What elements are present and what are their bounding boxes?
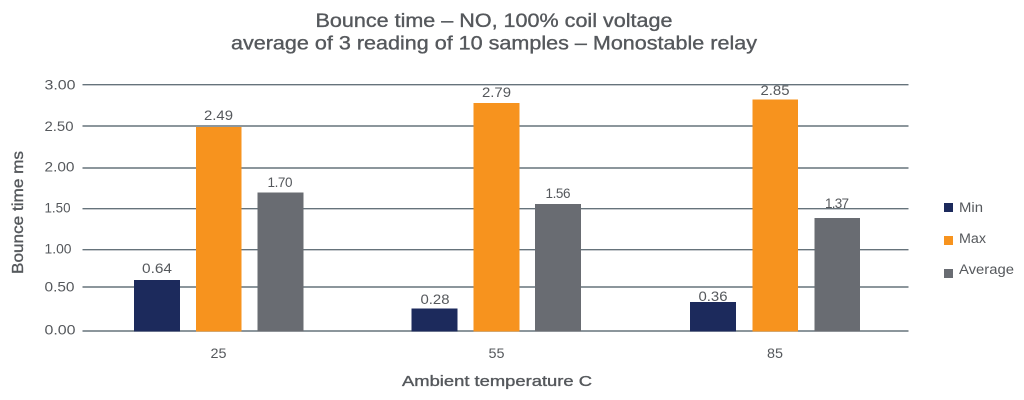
x axis title: Ambient temperature C (402, 374, 592, 390)
value labels (142, 83, 849, 307)
value labels: 0.28 (420, 292, 450, 307)
value labels: 0.36 (698, 289, 728, 304)
legend item: min: Min (959, 200, 983, 215)
bar: max 55 (474, 103, 520, 332)
y axis tick labels: 1.50 (44, 200, 71, 216)
legend (944, 200, 1014, 278)
legend item: average: Average (959, 262, 1014, 277)
bar: max 25 (196, 127, 242, 332)
bar: min 85 (690, 302, 736, 332)
bar: max 85 (752, 100, 798, 332)
value labels: 1.70 (268, 175, 292, 190)
bar: average 85 (814, 218, 860, 332)
y axis title: Bounce time ms (10, 151, 27, 274)
value labels: 1.56 (546, 186, 570, 201)
y axis tick labels: 0.50 (44, 278, 75, 294)
bar: min 55 (412, 308, 458, 332)
bar: average 55 (535, 204, 581, 332)
value labels: 2.85 (760, 83, 790, 98)
title (231, 10, 757, 54)
y axis tick labels: 2.50 (44, 118, 74, 134)
y axis tick labels: 2.00 (44, 158, 75, 174)
bar group: 85 (690, 100, 860, 332)
x axis tick labels: 55 (488, 346, 504, 361)
bar group: 55 (412, 103, 581, 332)
title: average of 3 reading of 10 samples – Monostable relay (231, 32, 757, 54)
value labels: 2.49 (204, 108, 233, 123)
y axis tick labels: 1.00 (44, 240, 72, 256)
value labels: 0.64 (142, 261, 173, 276)
title: Bounce time – NO, 100% coil voltage (316, 10, 672, 32)
value labels: 2.79 (482, 85, 511, 100)
x axis tick labels: 25 (210, 346, 226, 361)
legend item: max: Max (959, 231, 986, 246)
value labels: 1.37 (825, 196, 849, 211)
y axis tick labels: 0.00 (44, 322, 76, 338)
bar: min 25 (134, 280, 180, 332)
bar: average 25 (258, 192, 304, 332)
y axis tick labels (44, 76, 76, 338)
y axis tick labels: 3.00 (44, 76, 76, 92)
bar group: 25 (134, 127, 304, 332)
x axis tick labels: 85 (767, 346, 783, 361)
x axis tick labels (210, 346, 783, 361)
